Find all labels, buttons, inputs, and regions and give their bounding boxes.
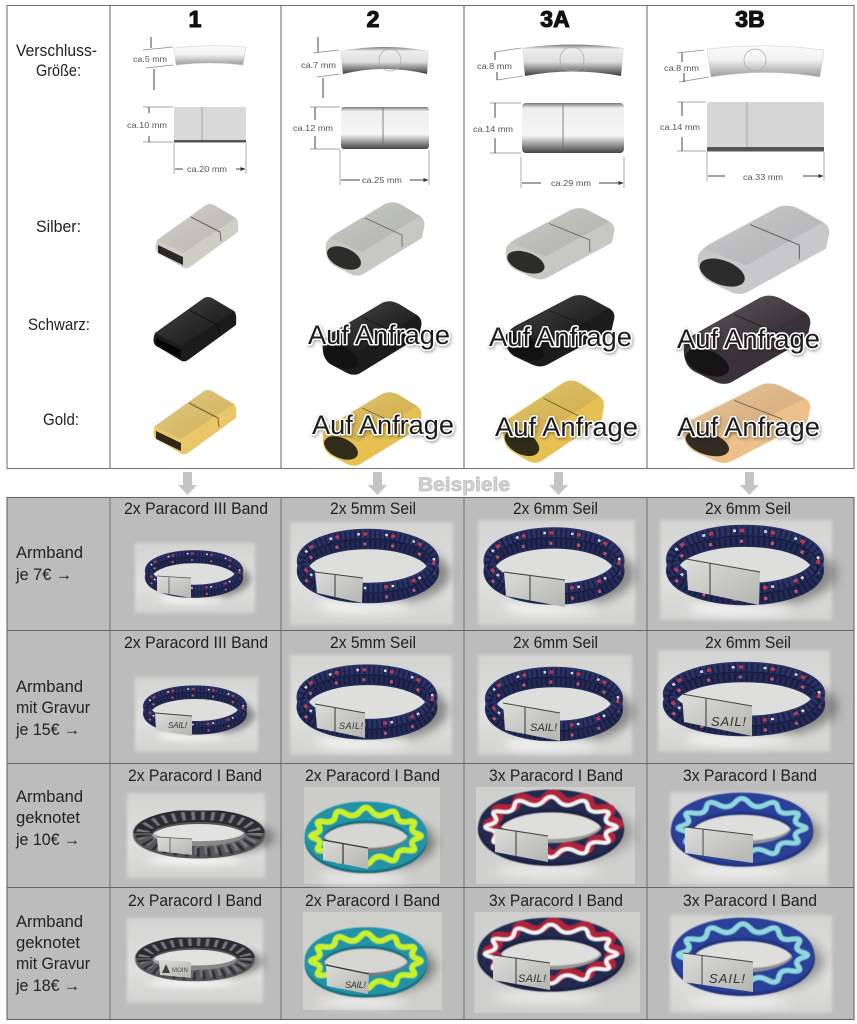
row label: Armband geknotet: geknotet xyxy=(16,809,80,827)
column headers: 1 xyxy=(189,6,202,32)
row 4 captions: 2x Paracord I Band xyxy=(305,892,440,910)
row labels xyxy=(16,42,97,429)
photo: row 1 col 1 bracelet xyxy=(135,543,255,613)
dimension drawing: closure 2 xyxy=(293,37,429,185)
closure photo: 3A black xyxy=(503,295,614,367)
closure photo: 3A silver xyxy=(503,208,614,280)
row label: Armband geknotet: je 10€ → xyxy=(15,831,80,849)
photo: row 4 col 3 knotted red bracelet xyxy=(474,912,640,1013)
row labels: Größe: xyxy=(36,62,81,80)
row label: Armband xyxy=(15,544,83,584)
photo: row 3 col 1 knotted grey bracelet xyxy=(127,793,274,878)
dimension drawing: closure 1 xyxy=(127,37,246,174)
row 4 captions: 2x Paracord I Band xyxy=(128,892,262,910)
row 1 captions: 2x Paracord III Band xyxy=(124,500,268,518)
row 2 captions xyxy=(124,634,791,652)
dimension drawing: closure 3A: ca.14 mm xyxy=(473,124,513,134)
column headers: 2 xyxy=(367,6,379,32)
photo: row 2 col 3 bracelet: SAIL! xyxy=(530,722,557,734)
arrows to examples xyxy=(178,472,759,495)
row label: Armband: Armband xyxy=(16,544,83,562)
closure photo: 3A gold xyxy=(501,380,604,463)
closure photo: 1 gold xyxy=(154,390,236,454)
dimension drawing: closure 2: ca.7 mm xyxy=(301,60,336,70)
photo: row 4 col 3 knotted red bracelet: SAIL! xyxy=(518,973,546,985)
dimension drawing: closure 3B: ca.33 mm xyxy=(743,172,783,182)
row labels: Silber: xyxy=(36,218,81,236)
on-request overlays: Auf Anfrage xyxy=(489,322,632,352)
closure photo: 3B gold xyxy=(681,383,810,463)
column headers: 3A xyxy=(540,6,570,32)
on-request overlays: Auf Anfrage xyxy=(308,320,450,350)
row 4 captions: 3x Paracord I Band xyxy=(683,892,817,910)
row 2 captions: 2x Paracord III Band xyxy=(124,634,268,652)
closure photo: 2 black xyxy=(320,301,422,375)
dimension drawing: closure 3B xyxy=(660,46,824,182)
dimension drawing: closure 3B: ca.8 mm xyxy=(664,63,699,73)
row 1 captions: 2x 5mm Seil xyxy=(330,500,416,518)
column headers xyxy=(189,6,765,32)
photo: row 3 col 2 knotted green bracelet xyxy=(304,787,440,884)
row 3 captions: 3x Paracord I Band xyxy=(683,767,817,785)
photo: row 1 col 3 bracelet xyxy=(478,520,635,625)
photo: row 2 col 3 bracelet xyxy=(478,655,634,755)
row label: Armband geknotet mit Gravur: je 18€ → xyxy=(15,977,80,995)
photo: row 4 col 1 knotted grey bracelet: MOIN xyxy=(172,968,188,974)
on-request overlays: Auf Anfrage xyxy=(495,412,638,442)
dimension drawing: closure 1: ca.5 mm xyxy=(133,54,167,64)
row 1 captions: 2x 6mm Seil xyxy=(705,500,791,518)
row label: Armband mit Gravur xyxy=(15,678,90,739)
dimension drawing: closure 2: ca.25 mm xyxy=(362,175,402,185)
photo: row 3 col 4 knotted blue bracelet xyxy=(670,792,828,885)
row labels: Verschluss- xyxy=(16,42,97,60)
photo: row 1 col 2 bracelet xyxy=(290,522,453,625)
photo: row 2 col 1 bracelet: SAIL! xyxy=(168,721,188,730)
row 2 captions: 2x 6mm Seil xyxy=(705,634,791,652)
row label: Armband: je 7€ → xyxy=(15,566,72,584)
photo: row 2 col 4 bracelet: SAIL! xyxy=(711,714,746,729)
closure photo: 1 silver xyxy=(156,204,238,268)
row 1 captions xyxy=(124,500,791,518)
panel: closure sizes table xyxy=(7,5,854,468)
photo: row 2 col 4 bracelet xyxy=(658,650,837,752)
row labels: Schwarz: xyxy=(28,316,90,334)
column headers: 3B xyxy=(735,6,765,32)
closure photo: 1 black xyxy=(154,297,236,362)
row 1 captions: 2x 6mm Seil xyxy=(513,500,598,518)
dimension drawing: closure 3A xyxy=(473,44,624,188)
row label: Armband mit Gravur: mit Gravur xyxy=(16,699,90,717)
row label: Armband geknotet mit Gravur: mit Gravur xyxy=(16,955,90,973)
photo: row 4 col 4 knotted blue bracelet: SAIL! xyxy=(709,971,745,986)
dimension drawing: closure 3B: ca.14 mm xyxy=(660,122,700,132)
row label: Armband geknotet mit Gravur: Armband xyxy=(16,913,83,931)
row 3 captions: 2x Paracord I Band xyxy=(128,767,262,785)
closure photo: 3B silver xyxy=(695,206,829,294)
on-request overlays: Auf Anfrage xyxy=(677,412,820,442)
dimension drawing: closure 3A: ca.29 mm xyxy=(551,178,591,188)
photo: row 2 col 2 bracelet: SAIL! xyxy=(339,721,363,731)
panel: examples table xyxy=(7,497,854,1020)
row 4 captions xyxy=(128,892,817,910)
photo: row 1 col 4 bracelet xyxy=(660,520,836,620)
row 3 captions: 3x Paracord I Band xyxy=(489,767,623,785)
row label: Armband geknotet mit Gravur xyxy=(15,913,90,995)
row 3 captions xyxy=(128,767,817,785)
photo: row 3 col 3 knotted red bracelet xyxy=(476,787,635,884)
row label: Armband geknotet xyxy=(15,788,83,849)
closure photo: 3B black xyxy=(681,296,810,384)
row labels: Gold: xyxy=(43,411,79,429)
closure photo: 2 gold xyxy=(320,392,422,466)
dimension drawing: closure 3A: ca.8 mm xyxy=(477,61,512,71)
on-request overlays: Auf Anfrage xyxy=(677,324,820,354)
row 2 captions: 2x 6mm Seil xyxy=(513,634,598,652)
photo: row 4 col 1 knotted grey bracelet xyxy=(127,918,263,1003)
dimension drawing: closure 1: ca.20 mm xyxy=(187,164,227,174)
heading: Beispiele: Beispiele xyxy=(418,475,510,496)
row 3 captions: 2x Paracord I Band xyxy=(305,767,440,785)
dimension drawing: closure 2: ca.12 mm xyxy=(293,123,333,133)
on-request overlays: Auf Anfrage xyxy=(312,410,454,440)
closure photo: 2 silver xyxy=(323,202,424,276)
row 2 captions: 2x 5mm Seil xyxy=(330,634,416,652)
photo: row 2 col 2 bracelet xyxy=(290,655,452,755)
on-request overlays xyxy=(308,320,820,442)
row 4 captions: 3x Paracord I Band xyxy=(489,892,623,910)
row label: Armband mit Gravur: je 15€ → xyxy=(15,721,80,739)
photo: row 4 col 2 knotted green bracelet: SAIL! xyxy=(345,980,366,990)
row label: Armband geknotet: Armband xyxy=(16,788,83,806)
row label: Armband mit Gravur: Armband xyxy=(16,678,83,696)
photo: row 4 col 2 knotted green bracelet xyxy=(303,912,442,1010)
dimension drawing: closure 1: ca.10 mm xyxy=(127,120,167,130)
photo: row 4 col 4 knotted blue bracelet xyxy=(670,915,832,1013)
photo: row 2 col 1 bracelet xyxy=(135,677,258,752)
row label: Armband geknotet mit Gravur: geknotet xyxy=(16,934,80,952)
